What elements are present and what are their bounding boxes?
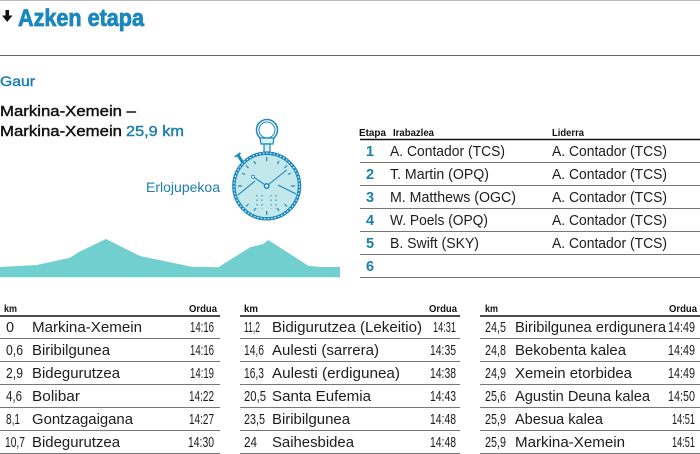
timetable column 2: Aulesti (sarrera) [272, 343, 379, 359]
stage 3 row: A. Contador (TCS) [552, 190, 667, 206]
stage 2 row: A. Contador (TCS) [552, 167, 667, 183]
stage route heading [0, 104, 184, 140]
timetable column 2: 14,6 [244, 343, 264, 359]
stage 5 row: 5 [366, 236, 374, 252]
timetable column 2: 14:35 [430, 343, 456, 359]
timetable column 1: 0,6 [6, 343, 23, 359]
timetable column 1: km [4, 303, 17, 315]
timetable column 3: Markina-Xemein [515, 435, 625, 451]
timetable column 2: 14:48 [430, 435, 456, 451]
timetable column 1: 8,1 [6, 412, 20, 428]
stage 5 row [366, 236, 667, 252]
stage route heading: 25,9 km [126, 124, 184, 140]
timetable column 3: Xemein etorbidea [515, 366, 633, 382]
timetable column 2: 24 [244, 435, 257, 451]
stage 5 row: B. Swift (SKY) [390, 236, 479, 252]
table: stage winners and leaders [359, 127, 700, 278]
timetable column 3: 25,9 [485, 412, 506, 428]
label: Erlojupekoa: Erlojupekoa [146, 180, 221, 195]
winners table header [359, 127, 584, 139]
timetable column 2: 23,5 [244, 412, 265, 428]
stage 6 row: 6 [366, 259, 374, 275]
stage 1 row: 1 [366, 144, 374, 160]
icon: stopwatch [234, 120, 300, 219]
timetable column 1: Ordua [189, 303, 217, 315]
timetable column 2: Santa Eufemia [272, 389, 372, 405]
timetable column 2: 11,2 [244, 320, 260, 336]
timetable column 2: 14:43 [430, 389, 456, 405]
timetable column 1: Bidegurutzea [32, 435, 121, 451]
stage 5 row: A. Contador (TCS) [552, 236, 667, 252]
timetable column 2: 14:38 [430, 366, 456, 382]
timetable column 3: Bekobenta kalea [515, 343, 627, 359]
stage route heading: Markina-Xemein [0, 124, 122, 140]
stage 4 row: 4 [366, 213, 374, 229]
icon: down arrow [2, 10, 12, 22]
winners table header: Liderra [552, 127, 584, 139]
timetable column 1: 0 [6, 320, 14, 336]
stage 2 row: 2 [366, 167, 374, 183]
stage 1 row: A. Contador (TCS) [390, 144, 505, 160]
timetable column 2: 14:31 [433, 320, 456, 336]
stage 4 row: A. Contador (TCS) [552, 213, 667, 229]
stage 3 row [366, 190, 667, 206]
timetable column 1: 14:22 [189, 389, 214, 405]
timetable column 3: 25,6 [485, 389, 506, 405]
stage 4 row [366, 213, 667, 229]
timetable column 3: Agustin Deuna kalea [515, 389, 651, 405]
timetable column 3 [480, 303, 700, 454]
stage 1 row: A. Contador (TCS) [552, 144, 667, 160]
timetable column 1: 14:16 [190, 343, 214, 359]
stage 2 row [366, 167, 667, 183]
timetable column 3: 24,5 [485, 320, 506, 336]
timetable column 3: Ordua [669, 303, 697, 315]
timetable column 2: 14:48 [430, 412, 456, 428]
timetable column 1: 14:16 [190, 320, 214, 336]
stage 1 row [366, 144, 667, 160]
timetable column 3: 25,9 [485, 435, 506, 451]
timetable column 2: Aulesti (erdigunea) [272, 366, 400, 382]
timetable column 2: Saihesbidea [272, 435, 355, 451]
timetable column 2: km [244, 303, 258, 315]
winners table header: Etapa [359, 127, 386, 139]
timetable column 3: km [485, 303, 498, 315]
timetable column 2: Ordua [429, 303, 457, 315]
timetable column 3: Biribilgunea erdigunera [515, 320, 667, 336]
timetable column 1: 4,6 [6, 389, 22, 405]
timetable column 2: Biribilgunea [272, 412, 351, 428]
timetable column 1: Bidegurutzea [32, 366, 121, 382]
stage 3 row: 3 [366, 190, 374, 206]
timetable column 1: Biribilgunea [32, 343, 111, 359]
timetable column 1: Bolibar [32, 389, 80, 405]
stage 3 row: M. Matthews (OGC) [390, 190, 516, 206]
timetable column 2 [240, 303, 460, 454]
timetable column 2: 16,3 [244, 366, 264, 382]
timetable column 3: Abesua kalea [515, 412, 604, 428]
elevation profile [0, 239, 340, 277]
stage 4 row: W. Poels (OPQ) [390, 213, 488, 229]
timetable column 2: 20,5 [244, 389, 266, 405]
timetable column 1: Gontzagaigana [32, 412, 134, 428]
subheading: Gaur: Gaur [0, 73, 35, 89]
winners table header: Irabazlea [393, 127, 434, 139]
timetable column 3: 24,8 [485, 343, 506, 359]
timetable column 1 [0, 303, 220, 454]
stage 2 row: T. Martin (OPQ) [390, 167, 489, 183]
title: Azken etapa [18, 5, 145, 32]
timetable column 1: 14:19 [190, 366, 214, 382]
timetable column 1: Markina-Xemein [32, 320, 142, 336]
timetable column 1: 10,7 [5, 435, 25, 451]
timetable column 1: 14:30 [188, 435, 214, 451]
timetable column 1: 2,9 [6, 366, 23, 382]
timetable column 2: Bidigurutzea (Lekeitio) [272, 320, 422, 336]
timetable column 3: 24,9 [485, 366, 506, 382]
timetable column 1: 14:27 [189, 412, 214, 428]
stage route heading: Markina-Xemein – [0, 104, 137, 120]
